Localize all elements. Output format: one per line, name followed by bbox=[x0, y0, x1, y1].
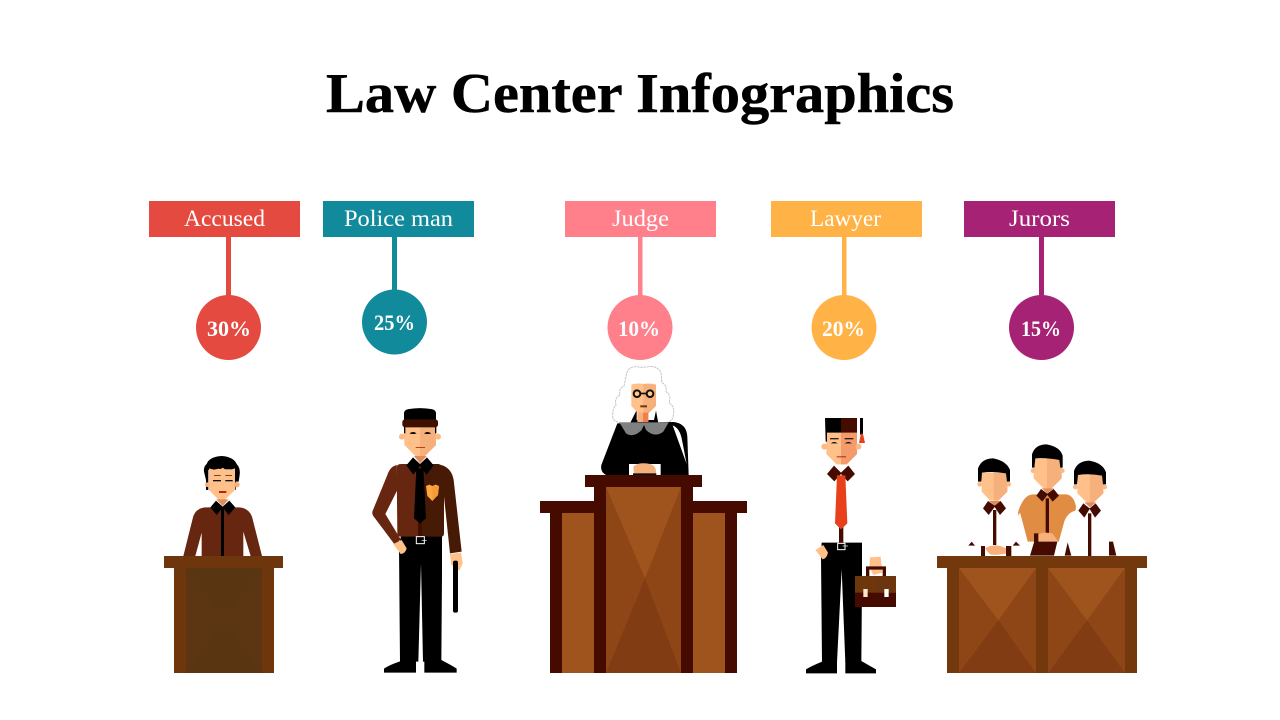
illustration: police man bbox=[372, 408, 463, 673]
juror left bbox=[968, 458, 1020, 556]
column: police man callout bbox=[323, 201, 474, 354]
badge: 15%: 15% bbox=[1021, 316, 1061, 341]
title: Law Center Infographics bbox=[326, 63, 954, 125]
label: judge bbox=[565, 201, 716, 237]
label: judge: Judge bbox=[612, 206, 669, 231]
badge: 30% bbox=[196, 295, 261, 360]
column: lawyer callout bbox=[771, 201, 922, 360]
label: jurors: Jurors bbox=[1009, 206, 1070, 231]
label: lawyer bbox=[771, 201, 922, 237]
juror centre bbox=[1013, 444, 1076, 557]
wig bbox=[613, 366, 674, 423]
column: judge callout bbox=[565, 201, 716, 360]
badge: 25% bbox=[362, 290, 427, 354]
badge: 30%: 30% bbox=[207, 316, 251, 341]
juror right bbox=[1055, 461, 1116, 556]
lectern bbox=[164, 556, 283, 673]
column: accused callout bbox=[149, 201, 300, 360]
desk bbox=[937, 556, 1147, 673]
illustration: three jurors at desk bbox=[937, 444, 1147, 673]
label: lawyer: Lawyer bbox=[810, 206, 881, 231]
illustration: judge at bench bbox=[540, 366, 747, 673]
label: jurors bbox=[964, 201, 1115, 237]
badge: 25%: 25% bbox=[374, 310, 415, 335]
label: accused: Accused bbox=[184, 206, 266, 231]
badge: 20%: 20% bbox=[822, 316, 865, 341]
badge: 10% bbox=[608, 295, 672, 360]
illustration: accused at lectern bbox=[164, 456, 283, 673]
bench bbox=[540, 475, 747, 673]
label: accused bbox=[149, 201, 300, 237]
label: police man bbox=[323, 201, 474, 237]
column: jurors callout bbox=[964, 201, 1115, 360]
badge: 20% bbox=[812, 295, 876, 360]
robe bbox=[601, 422, 689, 475]
illustration: lawyer bbox=[806, 418, 896, 673]
label: police man: Police man bbox=[344, 206, 454, 231]
badge: 15% bbox=[1009, 295, 1074, 360]
badge: 10%: 10% bbox=[618, 316, 660, 341]
